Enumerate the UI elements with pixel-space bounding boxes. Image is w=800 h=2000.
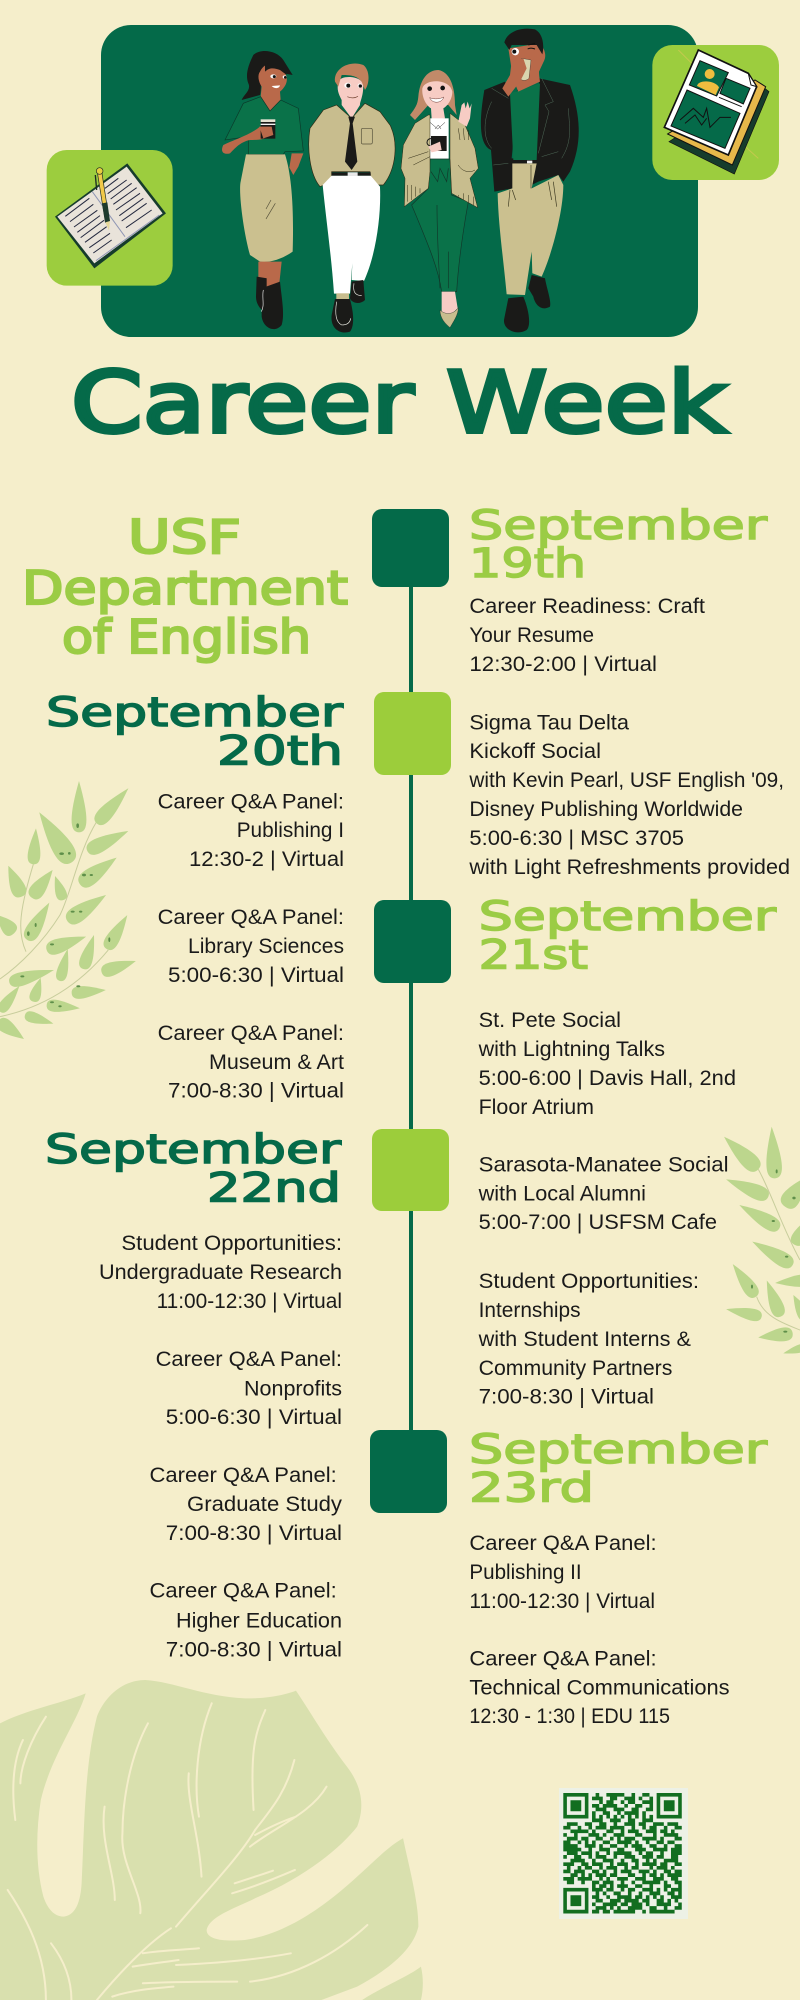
text block: September 20 right event: Disney Publishing Worldwide [469,798,743,821]
text block: September 23 events [469,1532,730,1728]
subtitle: USF Department of English [22,510,348,664]
decorative monstera leaf [0,1680,423,2000]
text block: September 21 right events: Community Partners [479,1357,672,1380]
heading: September 22nd: September [45,1127,342,1173]
text block: September 20 left events: Library Sciences [188,935,344,958]
text block: September 19 event [469,595,705,676]
QR code [559,1788,688,1919]
text block: September 21 right events: St. Pete Social [479,1009,621,1032]
text block: September 21 right events: 5:00-6:00 | Davis Hall, 2nd [479,1067,736,1090]
text block: September 21 right events: Sarasota-Manatee Social [479,1154,729,1176]
text block: September 19 event: Career Readiness: Craft [469,595,705,618]
text block: September 21 right events: with Student Interns & [478,1328,691,1351]
illustration: woman waving [401,70,478,328]
subtitle: USF Department of English: USF [128,510,241,564]
text block: September 21 right events: Internships [479,1299,581,1322]
text block: September 20 right event: Kickoff Social [469,740,601,763]
text block: September 20 right event [468,712,790,879]
icon tile: open notebook and pen [47,150,173,286]
text block: September 23 events: 11:00-12:30 | Virtual [469,1590,655,1613]
marker: September 21 [374,900,451,983]
text block: September 23 events: Publishing II [469,1561,582,1584]
dark green panel background [101,25,698,337]
heading: September 21st: 21st [479,932,588,978]
text block: September 23 events: 12:30 - 1:30 | EDU 115 [469,1705,670,1728]
text block: September 20 right event: with Light Refreshments provided [468,856,790,879]
decorative left sprig [0,781,138,1045]
text block: September 22 left events [99,1232,343,1662]
title: Career Week [71,354,727,453]
icon tile: magazine report [652,45,779,180]
text block: September 22 left events: Career Q&A Panel: [150,1580,337,1602]
heading: September 23rd: September [469,1427,768,1473]
heading: September 19th [469,503,768,587]
text block: September 21 right events [478,1009,736,1408]
heading: September 23rd: 23rd [469,1466,594,1512]
text block: September 21 right events: with Local Alumni [478,1182,646,1206]
text block: September 23 events: Career Q&A Panel: [469,1648,657,1670]
heading: September 22nd [45,1127,342,1212]
text block: September 20 left events: 12:30-2 | Virtual [189,848,344,871]
heading: September 21st: September [479,894,777,940]
text block: September 20 right event: with Kevin Pearl, USF English '09, [468,769,784,792]
text block: September 22 left events: Higher Education [176,1610,342,1632]
heading: September 20th: September [46,690,344,736]
text block: September 20 left events: 5:00-6:30 | Virtual [168,964,344,987]
text block: September 19 event: 12:30-2:00 | Virtual [469,653,657,676]
text block: September 22 left events: Graduate Study [187,1493,343,1516]
text block: September 21 right events: Student Opportunities: [479,1270,699,1293]
text block: September 23 events: Career Q&A Panel: [469,1532,657,1555]
marker: September 20 [374,692,451,775]
timeline [370,509,451,1513]
text block: September 20 right event: 5:00-6:30 | MSC 3705 [469,827,684,850]
heading: September 19th: 19th [469,541,586,587]
hero panel [47,25,779,337]
illustration: man with tie [309,64,395,332]
decorative right sprig [718,1126,800,1357]
text block: September 20 left events: Career Q&A Panel: [158,906,344,929]
text block: September 22 left events: 7:00-8:30 | Virtual [166,1522,342,1545]
illustration: man with blazer and cup [481,29,579,332]
text block: September 22 left events: 7:00-8:30 | Virtual [166,1638,342,1662]
text block: September 22 left events: Career Q&A Panel: [150,1464,337,1487]
text block: September 22 left events: Career Q&A Panel: [156,1348,342,1371]
marker: September 23 [370,1430,447,1513]
text block: September 22 left events: Student Opportunities: [121,1232,342,1255]
heading: September 19th: September [469,503,768,549]
heading: September 20th: 20th [217,728,343,774]
text block: September 20 left events: 7:00-8:30 | Virtual [168,1080,344,1102]
illustration: woman with coffee [222,51,303,329]
text block: September 22 left events: Nonprofits [244,1378,342,1400]
text block: September 22 left events: Undergraduate Research [99,1261,342,1284]
text block: September 21 right events: 7:00-8:30 | Virtual [479,1386,654,1408]
text block: September 20 left events: Career Q&A Panel: [158,1022,344,1045]
heading: September 22nd: 22nd [207,1166,341,1212]
text block: September 21 right events: Floor Atrium [479,1096,594,1119]
heading: September 21st [479,894,777,978]
heading: September 23rd [469,1427,768,1512]
timeline spine [409,585,413,1433]
marker: September 19 [372,509,449,587]
text block: September 21 right events: with Lightning Talks [478,1038,665,1061]
text block: September 20 left events: Museum & Art [209,1051,344,1074]
text block: September 22 left events: 5:00-6:30 | Virtual [166,1406,342,1429]
text block: September 20 left events: Publishing I [237,819,344,842]
heading: September 20th [46,690,344,774]
text block: September 22 left events: 11:00-12:30 | Virtual [157,1290,342,1313]
subtitle: USF Department of English: of English [62,610,311,664]
text block: September 20 right event: Sigma Tau Delta [469,712,629,734]
text block: September 21 right events: 5:00-7:00 | USFSM Cafe [479,1211,717,1234]
marker: September 22 [372,1129,449,1211]
text block: September 23 events: Technical Communications [469,1676,730,1700]
text block: September 20 left events [158,790,344,1102]
text block: September 20 left events: Career Q&A Panel: [158,790,344,814]
subtitle: USF Department of English: Department [22,561,348,615]
text block: September 19 event: Your Resume [469,624,594,647]
